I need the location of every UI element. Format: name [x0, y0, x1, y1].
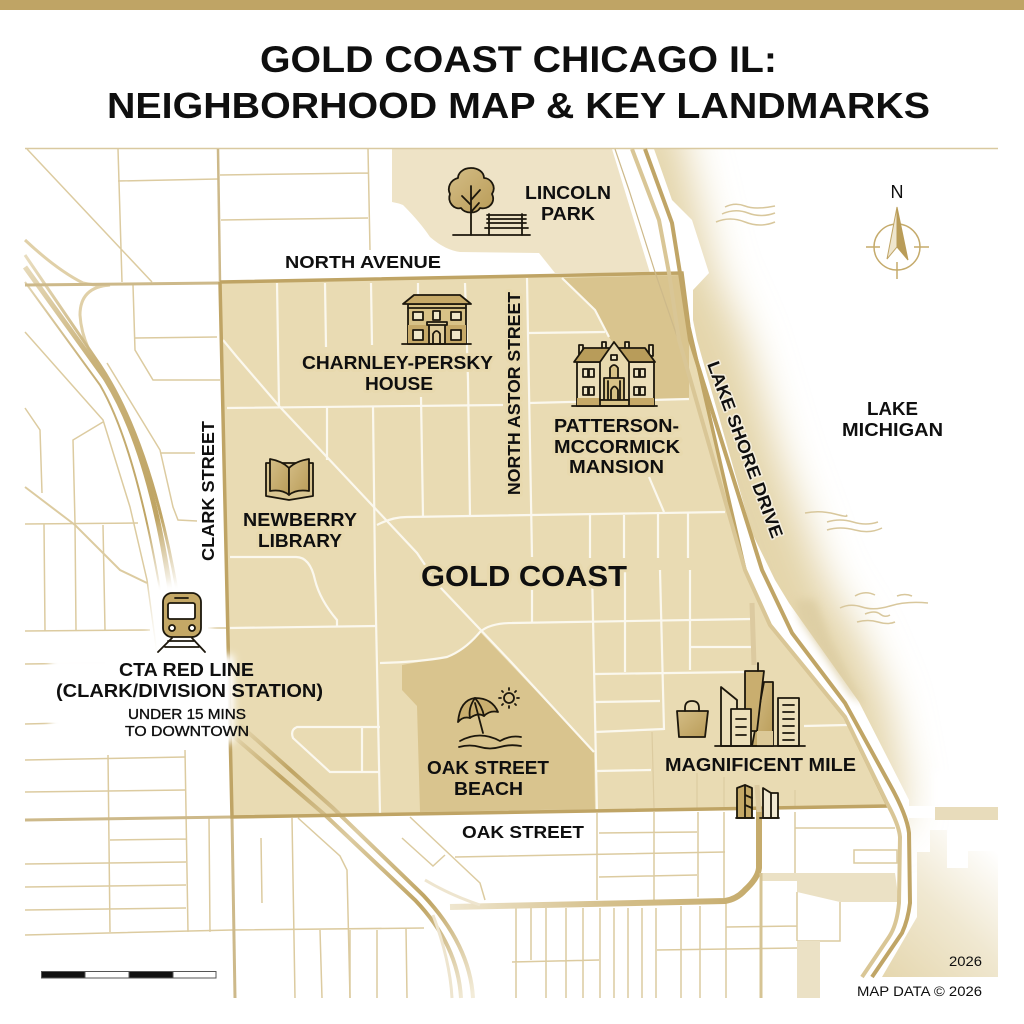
beach dark area — [402, 632, 595, 812]
label: cta red line: CTA RED LINE — [119, 660, 254, 680]
light road bands bottom right — [762, 873, 899, 998]
street labels: NORTH AVENUE — [285, 252, 441, 272]
icon: patterson-mccormick mansion — [572, 342, 657, 406]
label: charnley-persky house: HOUSE — [365, 374, 433, 394]
label: charnley-persky house — [302, 353, 493, 394]
central north-south road — [752, 603, 759, 812]
label: patterson-mccormick mansion: PATTERSON- — [554, 416, 679, 436]
label: oak street beach: BEACH — [454, 779, 523, 799]
label: oak street beach: OAK STREET — [427, 758, 549, 778]
label: charnley-persky house: CHARNLEY-PERSKY — [302, 353, 493, 373]
label: lincoln park: LINCOLN — [525, 183, 611, 203]
label: oak street beach — [427, 758, 549, 799]
label: magnificent mile: MAGNIFICENT MILE — [665, 755, 856, 775]
label: cta red line: (CLARK/DIVISION STATION) — [56, 681, 323, 701]
label: lake michigan: MICHIGAN — [842, 420, 943, 440]
highway: west expressway — [25, 240, 177, 590]
icon: train — [158, 593, 205, 652]
label: newberry library — [243, 510, 357, 551]
street labels: LAKE SHORE DRIVE — [703, 358, 787, 541]
label: cta red line: TO DOWNTOWN — [125, 724, 249, 740]
icon: charnley-persky house — [402, 295, 471, 344]
street labels: NORTH ASTOR STREET — [504, 292, 524, 495]
lake michigan water — [654, 149, 998, 977]
street labels: OAK STREET — [462, 822, 584, 842]
icon: beach umbrella and sun — [458, 688, 521, 748]
label: lake michigan — [842, 399, 943, 440]
icon: tree and bench — [449, 168, 530, 235]
street labels — [198, 252, 787, 842]
highway: southwest diagonal — [232, 725, 480, 998]
compass — [866, 182, 929, 279]
icon: open book — [266, 459, 313, 500]
map credits: 2026 — [949, 954, 982, 969]
lincoln park area — [392, 149, 650, 273]
neighborhood streets — [223, 278, 847, 813]
cross avenue road — [450, 810, 759, 907]
label: cta red line: UNDER 15 MINS — [128, 707, 246, 723]
street network outside neighborhood — [25, 148, 998, 998]
icon: small towers — [736, 785, 779, 818]
neighborhood polygon — [220, 273, 888, 817]
neighborhood border — [220, 273, 888, 817]
main street lines — [25, 149, 235, 998]
icon: magnificent mile skyline and bag — [677, 663, 805, 746]
map panel — [23, 148, 998, 998]
compass: N — [890, 182, 904, 202]
label: lake michigan: LAKE — [867, 399, 918, 419]
label: patterson-mccormick mansion — [554, 416, 680, 477]
label: newberry library: LIBRARY — [258, 531, 342, 551]
mansion dark area — [562, 275, 689, 400]
top gold bar — [0, 0, 1024, 10]
title: NEIGHBORHOOD MAP & KEY LANDMARKS — [107, 85, 930, 126]
label: patterson-mccormick mansion: MCCORMICK — [554, 437, 680, 457]
label: lincoln park: PARK — [541, 204, 595, 224]
scale bar — [42, 972, 216, 978]
label: patterson-mccormick mansion: MANSION — [569, 457, 664, 477]
label: gold coast: GOLD COAST — [421, 561, 627, 593]
title: GOLD COAST CHICAGO IL: — [260, 39, 777, 80]
lake waves — [716, 204, 928, 624]
lake shore drive — [615, 149, 910, 977]
map credits: MAP DATA © 2026 — [857, 984, 982, 999]
label: cta red line — [56, 660, 323, 740]
map credits — [857, 954, 982, 999]
title — [107, 39, 930, 126]
white halo behind transit label — [50, 585, 234, 743]
street labels: CLARK STREET — [198, 421, 218, 561]
label: lincoln park — [525, 183, 611, 224]
label: newberry library: NEWBERRY — [243, 510, 357, 530]
